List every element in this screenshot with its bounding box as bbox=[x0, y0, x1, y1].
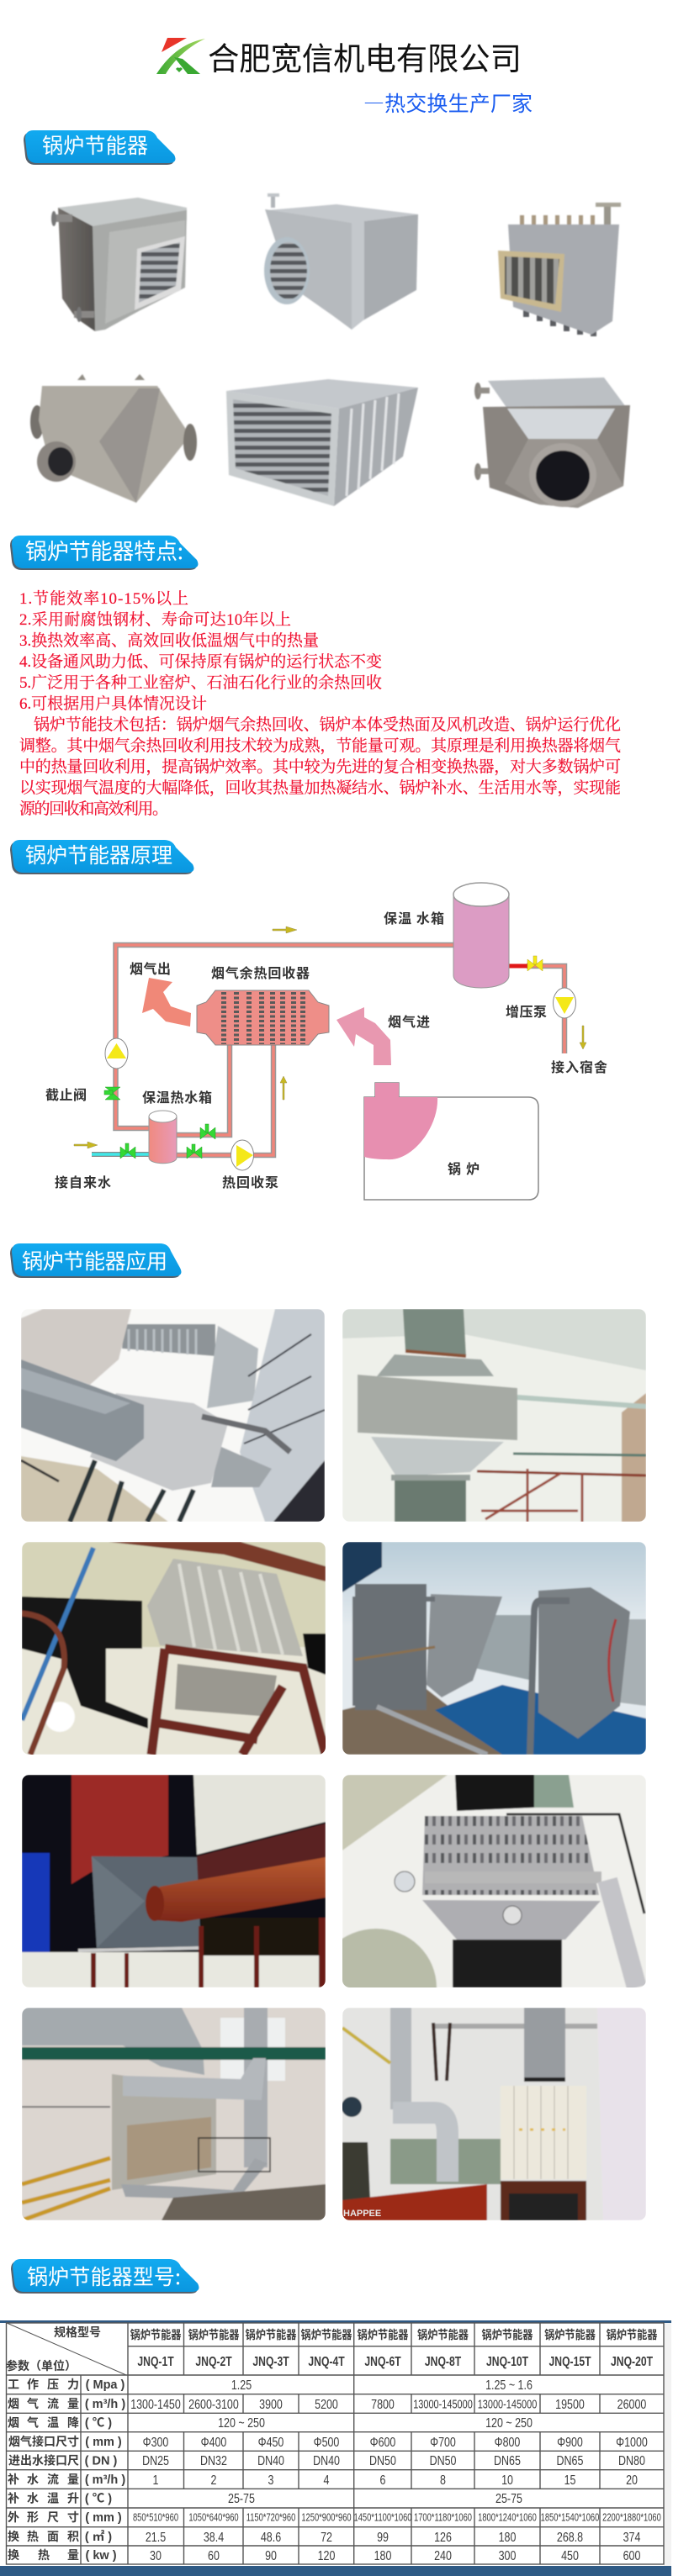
text block: features and description: 调整。其中烟气余热回收利用技术较为成熟，节能量可观。其原理是利用换热器将烟气 bbox=[19, 736, 621, 755]
row: water connection size: DN50 bbox=[369, 2454, 396, 2468]
row: feed water flow: 量 bbox=[67, 2471, 79, 2488]
row: outer dimensions: 寸 bbox=[67, 2509, 79, 2526]
table: model specification: 锅炉节能器 bbox=[301, 2325, 352, 2342]
diagram labels: 锅 炉 bbox=[448, 1158, 480, 1178]
row: flue connection size: Φ300 bbox=[143, 2436, 168, 2450]
photo: application 6, unit with gauges bbox=[342, 1775, 646, 1987]
row: outer dimensions: 1050*640*960 bbox=[188, 2512, 239, 2524]
text block: features and description: 源的回收和高效利用。 bbox=[19, 800, 168, 818]
row: flue gas flow bbox=[8, 2395, 646, 2412]
row: flue gas flow: 13000-145000 bbox=[478, 2397, 537, 2411]
row: heat exchange area bbox=[8, 2528, 640, 2545]
title: company name: 合肥宽信机电有限公司 bbox=[208, 34, 522, 79]
logo: company K mark bbox=[156, 38, 205, 74]
row: flue gas flow: 19500 bbox=[555, 2398, 585, 2412]
row: flue gas temperature drop: ( ℃ ) bbox=[85, 2416, 112, 2430]
table: model specification: JNQ-6T bbox=[364, 2354, 401, 2370]
row: water connection size: ( DN ) bbox=[85, 2455, 117, 2468]
row: working pressure: ( Mpa ) bbox=[86, 2378, 125, 2392]
row: flue connection size: Φ800 bbox=[495, 2436, 520, 2450]
row: water connection size: DN65 bbox=[557, 2454, 583, 2468]
text block: features and description: 5.广泛用于各种工业窑炉、石油石化行业的余热回收 bbox=[19, 673, 382, 692]
heading: 锅炉节能器特点: 锅炉节能器特点: bbox=[25, 535, 183, 566]
text block: features and description: 2.采用耐腐蚀钢材、寿命可达10年以上 bbox=[19, 610, 291, 629]
photo: application 3, exchanger on red frame bbox=[22, 1542, 326, 1755]
diagram labels bbox=[45, 907, 607, 1191]
text block: features and description: 3.换热效率高、高效回收低温烟气中的热量 bbox=[19, 631, 319, 650]
text block: features and description: 锅炉节能技术包括：锅炉烟气余热回收、锅炉本体受热面及风机改造、锅炉运行优化 bbox=[34, 715, 621, 734]
diagram labels: 烟气余热回收器 bbox=[211, 962, 310, 982]
table: model specification: JNQ-3T bbox=[252, 2354, 289, 2370]
row: water connection size: DN50 bbox=[430, 2454, 456, 2468]
row: flue gas temperature drop: 烟 bbox=[8, 2415, 19, 2431]
row: flue gas temperature drop: 120 ~ 250 bbox=[218, 2416, 265, 2431]
row: feed water flow: 1 bbox=[153, 2473, 158, 2488]
row: outer dimensions: 1150*720*960 bbox=[246, 2512, 295, 2524]
row: heat exchange area: 268.8 bbox=[557, 2531, 583, 2545]
diagram labels: 烟气进 bbox=[388, 1011, 430, 1031]
row: water connection size: DN80 bbox=[618, 2454, 645, 2468]
row: feed water temperature rise: 补 bbox=[8, 2490, 19, 2507]
row: heat exchange capacity: 120 bbox=[318, 2549, 335, 2563]
table: model specification: 锅炉节能器 bbox=[607, 2325, 657, 2342]
row: outer dimensions: 尺 bbox=[47, 2509, 59, 2526]
table: model specification: JNQ-10T bbox=[486, 2354, 528, 2370]
row: feed water temperature rise: 升 bbox=[67, 2490, 79, 2507]
row: heat exchange capacity: ( kw ) bbox=[85, 2549, 117, 2563]
photo: application 2, vertical flue unit bbox=[342, 1309, 646, 1522]
row: outer dimensions: 形 bbox=[27, 2509, 39, 2526]
row: flue gas flow: 2600-3100 bbox=[188, 2398, 239, 2412]
row: flue gas flow: 量 bbox=[67, 2395, 79, 2412]
table: model specification: 锅炉节能器 bbox=[417, 2325, 469, 2342]
table: model specification: JNQ-20T bbox=[611, 2354, 653, 2370]
text block: features and description: 4.设备通风助力低、可保持原有锅炉的运行状态不变 bbox=[19, 652, 382, 671]
product photo 6 bbox=[474, 377, 630, 508]
row: heat exchange capacity: 600 bbox=[623, 2549, 640, 2563]
row: water connection size: 进出水接口尺 bbox=[8, 2452, 79, 2468]
row: heat exchange capacity: 450 bbox=[561, 2549, 579, 2563]
row: water connection size: DN40 bbox=[257, 2454, 284, 2468]
table: model specification: 规格型号 bbox=[54, 2324, 101, 2341]
row: flue connection size bbox=[8, 2433, 648, 2450]
row: feed water temperature rise: ( ℃ ) bbox=[85, 2492, 112, 2505]
subtitle: —热交换生产厂家 bbox=[363, 87, 533, 118]
row: flue connection size: ( mm ) bbox=[85, 2436, 122, 2449]
row: water connection size: DN40 bbox=[313, 2454, 340, 2468]
row: flue connection size: Φ600 bbox=[370, 2436, 395, 2450]
text block: features and description: 以实现烟气温度的大幅降低，回收其热量加热凝结水、锅炉补水、生活用水等，实现能 bbox=[19, 779, 621, 797]
row: outer dimensions: 1800*1240*1060 bbox=[478, 2512, 537, 2524]
row: feed water flow: 20 bbox=[626, 2473, 638, 2488]
row: outer dimensions: 1700*1180*1060 bbox=[414, 2512, 472, 2524]
photo: application 5, red duct and grey box bbox=[22, 1775, 326, 1987]
heading: 锅炉节能器应用: 锅炉节能器应用 bbox=[22, 1245, 167, 1275]
heading: 锅炉节能器原理: 锅炉节能器原理 bbox=[25, 839, 172, 869]
diagram labels: 增压泵 bbox=[506, 1000, 547, 1021]
text block: features and description: 中的热量回收利用，提高锅炉效率。其中较为先进的复合相变换热器，对大多数锅炉可 bbox=[19, 757, 621, 776]
arrows bbox=[142, 978, 191, 1027]
row: flue gas temperature drop bbox=[8, 2415, 533, 2431]
row: feed water temperature rise: 水 bbox=[27, 2490, 39, 2507]
row: feed water temperature rise: 25-75 bbox=[228, 2492, 255, 2506]
table: model specification: 锅炉节能器 bbox=[544, 2325, 596, 2342]
row: heat exchange area: 180 bbox=[499, 2531, 516, 2545]
table: model specification: JNQ-15T bbox=[549, 2354, 591, 2370]
row: flue gas flow: 7800 bbox=[371, 2398, 395, 2412]
row: outer dimensions: 2200*1880*1060 bbox=[602, 2512, 661, 2524]
row: heat exchange area: 99 bbox=[377, 2531, 389, 2545]
row: outer dimensions: ( mm ) bbox=[85, 2511, 122, 2525]
heading: 锅炉节能器 bbox=[24, 129, 175, 165]
row: feed water temperature rise: 25-75 bbox=[495, 2492, 522, 2506]
row: feed water flow: 4 bbox=[324, 2473, 329, 2488]
row: outer dimensions: 850*510*960 bbox=[133, 2512, 178, 2524]
row: flue gas flow: ( m³/h ) bbox=[85, 2398, 125, 2411]
heading: 锅炉节能器原理 bbox=[10, 839, 193, 874]
row: feed water flow: 15 bbox=[564, 2473, 575, 2488]
table: model specification: 锅炉节能器 bbox=[482, 2325, 533, 2342]
table: model specification: 锅炉节能器 bbox=[188, 2325, 239, 2342]
pipes bbox=[92, 945, 564, 1155]
diagram labels: 截止阀 bbox=[45, 1084, 87, 1104]
row: heat exchange capacity: 热 bbox=[38, 2547, 50, 2563]
row: outer dimensions: 1250*900*960 bbox=[301, 2512, 352, 2524]
row: heat exchange area: ( ㎡ ) bbox=[85, 2529, 112, 2544]
product photo 4 bbox=[30, 374, 197, 503]
photo: application 8, white unit with red stand: HAPPEE bbox=[343, 2209, 381, 2219]
row: heat exchange area: 48.6 bbox=[261, 2531, 281, 2545]
row: flue gas flow: 13000-145000 bbox=[413, 2397, 473, 2411]
row: heat exchange area: 积 bbox=[67, 2528, 79, 2545]
diagram labels: 热回收泵 bbox=[222, 1171, 278, 1191]
row: heat exchange area: 126 bbox=[434, 2531, 452, 2545]
row: heat exchange area: 热 bbox=[27, 2528, 39, 2545]
row: feed water flow: 6 bbox=[380, 2473, 385, 2488]
row: flue gas flow: 26000 bbox=[617, 2398, 646, 2412]
photo: application 4, rooftop units bbox=[342, 1542, 646, 1755]
row: flue connection size: Φ500 bbox=[314, 2436, 339, 2450]
row: flue gas temperature drop: 温 bbox=[47, 2415, 59, 2431]
row: feed water flow: 补 bbox=[8, 2471, 19, 2488]
heading: 锅炉节能器: 锅炉节能器 bbox=[42, 129, 148, 160]
row: outer dimensions bbox=[8, 2509, 661, 2526]
row: flue connection size: Φ900 bbox=[557, 2436, 583, 2450]
diagram labels: 接入宿舍 bbox=[551, 1056, 607, 1076]
table: model specification: 锅炉节能器 bbox=[246, 2325, 296, 2342]
diagram labels: 烟气出 bbox=[130, 958, 171, 978]
row: flue connection size: 烟气接口尺寸 bbox=[8, 2433, 79, 2450]
row: water connection size bbox=[8, 2452, 645, 2468]
row: flue gas flow: 气 bbox=[27, 2395, 39, 2412]
heading: 锅炉节能器型号: 锅炉节能器型号: bbox=[27, 2261, 181, 2291]
diagram labels: 保温 水箱 bbox=[384, 907, 444, 927]
row: flue gas flow: 烟 bbox=[8, 2395, 19, 2412]
text block: features and description: 1.节能效率10-15%以上 bbox=[19, 589, 188, 608]
row: flue connection size: Φ450 bbox=[258, 2436, 284, 2450]
row: flue gas temperature drop: 气 bbox=[27, 2415, 39, 2431]
row: flue gas temperature drop: 120 ~ 250 bbox=[485, 2416, 533, 2431]
row: feed water flow: ( m³/h ) bbox=[85, 2473, 125, 2487]
diagram labels: 接自来水 bbox=[55, 1171, 111, 1191]
row: heat exchange capacity: 300 bbox=[499, 2549, 516, 2563]
row: heat exchange area: 换 bbox=[8, 2528, 19, 2545]
row: feed water flow: 水 bbox=[27, 2471, 39, 2488]
row: heat exchange capacity bbox=[8, 2547, 640, 2563]
valves bbox=[104, 956, 543, 1159]
tank small bbox=[149, 1111, 177, 1164]
table: model specification bbox=[0, 2320, 671, 2576]
row: flue connection size: Φ1000 bbox=[616, 2436, 648, 2450]
row: flue connection size: Φ400 bbox=[201, 2436, 226, 2450]
table: model specification: 参数（单位） bbox=[6, 2357, 77, 2374]
row: flue connection size: Φ700 bbox=[430, 2436, 456, 2450]
row: heat exchange capacity: 240 bbox=[434, 2549, 452, 2563]
product photo 1 bbox=[51, 198, 187, 331]
row: flue gas temperature drop: 降 bbox=[67, 2415, 79, 2431]
row: feed water flow: 2 bbox=[211, 2473, 216, 2488]
row: outer dimensions: 1850*1540*1060 bbox=[541, 2512, 599, 2524]
tank large bbox=[453, 883, 509, 988]
row: heat exchange capacity: 量 bbox=[67, 2547, 79, 2563]
heat recovery unit bbox=[197, 990, 329, 1045]
table: model specification: 锅炉节能器 bbox=[358, 2325, 408, 2342]
row: heat exchange area: 374 bbox=[623, 2531, 640, 2545]
row: flue gas flow: 3900 bbox=[259, 2398, 283, 2412]
table: model specification: 锅炉节能器 bbox=[130, 2325, 181, 2342]
row: feed water temperature rise bbox=[8, 2490, 522, 2507]
row: working pressure: 压 bbox=[47, 2376, 59, 2393]
text block: features and description bbox=[19, 589, 621, 818]
row: working pressure: 作 bbox=[27, 2376, 39, 2393]
row: heat exchange area: 38.4 bbox=[204, 2531, 224, 2545]
row: water connection size: DN65 bbox=[494, 2454, 521, 2468]
table: model specification: JNQ-4T bbox=[308, 2354, 345, 2370]
row: working pressure: 1.25 ~ 1.6 bbox=[485, 2378, 533, 2393]
row: working pressure: 1.25 bbox=[231, 2378, 252, 2393]
row: heat exchange area: 72 bbox=[321, 2531, 332, 2545]
photo: application 8, white unit with red stand bbox=[342, 2008, 646, 2220]
row: feed water flow: 8 bbox=[440, 2473, 446, 2488]
product photo 3 bbox=[498, 203, 621, 336]
table: model specification: JNQ-1T bbox=[137, 2354, 174, 2370]
row: feed water flow: 10 bbox=[501, 2473, 513, 2488]
diagram labels: 保温热水箱 bbox=[142, 1086, 212, 1106]
row: heat exchange capacity: 60 bbox=[208, 2549, 220, 2563]
photo: application 1, duct installation bbox=[21, 1309, 325, 1522]
product photo 2 bbox=[264, 193, 418, 330]
row: feed water flow bbox=[8, 2471, 638, 2488]
row: outer dimensions: 外 bbox=[8, 2509, 19, 2526]
row: flue gas flow: 流 bbox=[47, 2395, 59, 2412]
photo: application 7, silver ducts room bbox=[22, 2008, 326, 2220]
row: feed water temperature rise: 温 bbox=[47, 2490, 59, 2507]
diagram: heat recovery principle bbox=[45, 883, 607, 1200]
row: heat exchange area: 面 bbox=[47, 2528, 59, 2545]
product photo 5 bbox=[226, 379, 418, 506]
row: flue gas flow: 1300-1450 bbox=[130, 2398, 181, 2412]
row: feed water flow: 3 bbox=[268, 2473, 273, 2488]
table: model specification: JNQ-8T bbox=[425, 2354, 461, 2370]
row: working pressure bbox=[8, 2376, 533, 2393]
row: heat exchange capacity: 30 bbox=[150, 2549, 162, 2563]
table: model specification: JNQ-2T bbox=[195, 2354, 232, 2370]
row: water connection size: DN32 bbox=[200, 2454, 227, 2468]
row: water connection size: DN25 bbox=[142, 2454, 169, 2468]
row: outer dimensions: 1450*1100*1060 bbox=[354, 2512, 411, 2524]
row: heat exchange capacity: 90 bbox=[265, 2549, 277, 2563]
row: heat exchange capacity: 换 bbox=[8, 2547, 19, 2563]
pumps bbox=[105, 988, 575, 1170]
row: heat exchange capacity: 180 bbox=[374, 2549, 391, 2563]
row: working pressure: 力 bbox=[67, 2376, 79, 2393]
row: flue gas flow: 5200 bbox=[315, 2398, 338, 2412]
boiler bbox=[364, 1083, 538, 1200]
row: feed water flow: 流 bbox=[47, 2471, 59, 2488]
text block: features and description: 6.可根据用户具体情况设计 bbox=[19, 694, 207, 713]
row: working pressure: 工 bbox=[8, 2376, 19, 2393]
row: heat exchange area: 21.5 bbox=[146, 2531, 166, 2545]
